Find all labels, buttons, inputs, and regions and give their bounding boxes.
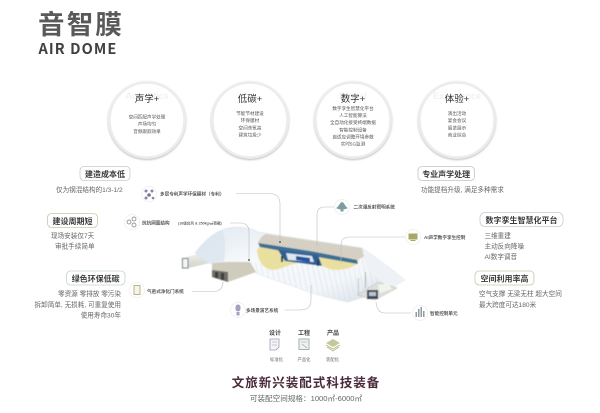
feature: 建设周期短: 建设周期短 (52, 216, 92, 226)
side unit (212, 262, 256, 282)
panel: 数字+ (316, 82, 390, 158)
entrance tube (182, 253, 210, 268)
feature: 空间利用率高: 空间利用率高 (480, 274, 528, 284)
feature: 建造成本低 (56, 166, 130, 194)
panel: 低碳+: 空间含氧高 (239, 124, 262, 132)
feature: 建设周期短: 现场安装仅7天 (51, 231, 95, 240)
callout: 多层专利声学环保膜材: 多层专利声学环保膜材（专利） (160, 190, 224, 198)
title: AIR DOME (38, 38, 117, 59)
feature: 绿色环保低碳: 零资源 零排放 零污染 (58, 289, 121, 298)
callout: 抗帆网面结构 (124, 214, 250, 261)
membrane ribs (250, 258, 405, 302)
callout: 抗帆网面结构: (16级台风 & 250kg/㎡荷载) (178, 220, 223, 226)
panel: 声学+: 声场均匀 (138, 120, 157, 128)
interior blue band (258, 243, 358, 264)
callout: 智能控制单元 (376, 302, 458, 320)
callout: 气密式净化门系统: 气密式净化门系统 (147, 288, 184, 295)
panel: 数字+: 全自动化接受终端数据 (330, 119, 376, 126)
process: 设计 标准化: 标准化 (270, 356, 284, 363)
panel: 体验+: 展览展示 (448, 124, 467, 132)
panel: 声学+ (110, 82, 184, 158)
stage (278, 250, 322, 266)
panel: 体验+: 体验+ (445, 93, 470, 105)
feature: 专业声学处理 (418, 166, 504, 194)
process: 工程 产品化: 工程 (298, 329, 310, 337)
main heading: 文旅新兴装配式科技装备 (232, 375, 380, 390)
panel: 低碳+ (212, 82, 288, 158)
callout: 抗帆网面结构: 抗抗网面结构 (142, 220, 170, 226)
feature: 空间利用率高 (475, 271, 562, 309)
feature: 数字孪生智慧化平台: 主动反向降噪 (484, 242, 524, 250)
feature: 绿色环保低碳: 绿色环保低碳 (72, 274, 120, 284)
callout: 智能控制单元: 智能控制单元 (430, 310, 458, 317)
dome illustration (182, 227, 405, 302)
interior floor (257, 243, 360, 270)
feature: 数字孪生智慧化平台: AI数字调音 (484, 252, 518, 261)
panel: 低碳+: 环保膜材 (241, 117, 260, 124)
dome shell (195, 227, 405, 302)
callout: AI声学数字孪生控制 (341, 230, 466, 264)
process: 产品 装配化: 产品 (327, 329, 339, 337)
title (38, 10, 124, 59)
title: 音智膜 (38, 10, 124, 40)
panel: 体验+ (420, 82, 494, 158)
feature: 空间利用率高: 空气支撑 无梁无柱 超大空间 (479, 289, 562, 298)
panel: 数字+: 人工智能算法 (339, 112, 367, 119)
callout: 多场景演艺系统 (230, 285, 311, 318)
panel: 数字+: 智能控制设备 (339, 126, 367, 134)
feature: 绿色环保低碳 (35, 271, 125, 320)
panel: 数字+: 数字+ (341, 93, 366, 105)
process: 设计 标准化: 设计 (269, 329, 281, 337)
process: 产品 装配化: 装配化 (326, 356, 340, 363)
lattice roof (258, 234, 364, 260)
feature: 数字孪生智慧化平台: 三维重建 (484, 231, 511, 240)
feature: 专业声学处理: 专业声学处理 (422, 169, 470, 179)
feature: 专业声学处理: 功能提档升级, 满足多种需求 (421, 185, 504, 194)
panel: 低碳+: 低碳+ (238, 93, 263, 105)
panel: 体验+: 宴会会议 (448, 117, 467, 124)
panel: 数字+: 自适应调整环境参数 (332, 134, 374, 140)
panel: 体验+: 商业综合 (448, 132, 467, 138)
feature: 数字孪生智慧化平台: 数字孪生智慧化平台 (486, 215, 558, 225)
callout: 多场景演艺系统: 多场景演艺系统 (246, 307, 279, 314)
panel: 体验+: Experience (433, 91, 481, 101)
callout: 气密式净化门系统 (130, 282, 223, 298)
panel: 体验+: 演出活动 (448, 110, 467, 117)
panel: 低碳+: 节能节材建设 (236, 110, 264, 117)
feature: 建造成本低: 仅为钢混结构的1/3-1/2 (56, 185, 123, 194)
process: 工程 产品化 (298, 329, 311, 363)
callout: 二次漫反射照明系统 (317, 200, 395, 246)
process: 设计 标准化 (269, 329, 284, 363)
process: 产品 装配化 (326, 329, 340, 363)
panel: 声学+: 空间匹配声学处理 (129, 114, 166, 120)
panel: 低碳+: 建筑垃圾少 (239, 132, 262, 138)
panel: 声学+: 音频跟踪效果 (133, 128, 161, 135)
feature: 数字孪生智慧化平台 (480, 212, 563, 261)
feature: 绿色环保低碳: 使用寿命30年 (81, 310, 121, 320)
control unit (357, 282, 397, 300)
panel: 数字+: Digital (339, 91, 367, 101)
callout: 多层专利声学环保膜材 (142, 186, 281, 243)
feature: 建造成本低: 建造成本低 (85, 169, 125, 179)
subheading: 可装配空间规格：1000㎡-6000㎡ (250, 393, 363, 403)
panel: 声学+: Acoustics (125, 91, 169, 101)
panel: 数字+: 数字孪生智慧化平台 (332, 105, 374, 112)
process: 工程 产品化: 产品化 (298, 356, 311, 363)
feature: 建设周期短: 审批手续简单 (55, 242, 95, 250)
callout: 二次漫反射照明系统: 二次漫反射照明系统 (354, 204, 395, 210)
panel: 声学+: 声学+ (135, 93, 160, 105)
feature: 绿色环保低碳: 拆卸简单, 无损耗, 可重复使用 (35, 300, 121, 309)
feature: 建设周期短 (48, 214, 98, 250)
feature: 空间利用率高: 最大跨度可达180米 (479, 300, 537, 309)
callout: AI声学数字孪生控制: AI声学数字孪生控制 (424, 234, 466, 241)
panel: 数字+: 实时5G监测 (341, 140, 366, 148)
